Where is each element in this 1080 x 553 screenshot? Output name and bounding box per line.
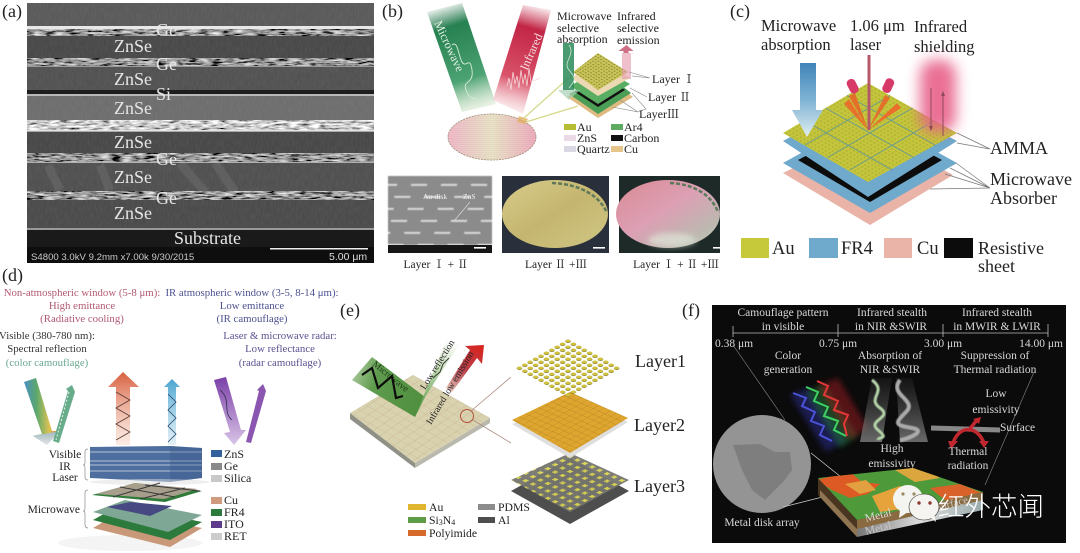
- SEM info bar: [31, 248, 368, 263]
- absorption label: NIR &SWIR: [860, 364, 921, 376]
- panel f: spectrum-segmented metasurface: [712, 305, 1066, 543]
- panel e: layered metasurface: [340, 300, 686, 540]
- base sheet: [350, 375, 490, 468]
- panel label e: (e): [340, 300, 360, 321]
- SEM image: [27, 3, 374, 263]
- callout: infrared selective emission: Infrared: [617, 9, 656, 23]
- legend b: Quartz: [577, 142, 610, 156]
- thermal radiation label: radiation: [948, 460, 989, 472]
- wavelength axis: [733, 324, 1048, 337]
- layered absorber: [783, 83, 957, 225]
- watermark text: 红外芯闻: [938, 492, 1044, 522]
- band headings: [737, 307, 1041, 333]
- heading: laser: laser: [850, 35, 882, 54]
- material labels: Ge: [156, 20, 177, 40]
- arrow: visible incident: [24, 378, 60, 445]
- multilayer film: [90, 446, 210, 485]
- laser and microwave radar text: (radar camouflage): [239, 357, 322, 369]
- legend d bottom: [211, 493, 247, 543]
- SEM info bar: S4800 3.0kV 9.2mm x7.00k 9/30/2015: [31, 252, 194, 263]
- layer labels: Layer2: [634, 415, 685, 435]
- legend d top: Silica: [224, 471, 252, 485]
- metal disk array label: Metal disk array: [724, 517, 800, 529]
- legend b: Ar4: [624, 120, 643, 134]
- material labels: Ge: [156, 188, 177, 208]
- layer labels: LayerⅢ: [639, 107, 679, 121]
- high emissivity label: High: [880, 443, 904, 455]
- panel a: SEM cross-section: [2, 1, 374, 263]
- microwave absorber stack: [58, 483, 202, 551]
- legend e: 3: [439, 518, 443, 527]
- projection lines: [733, 345, 1034, 485]
- material labels: ZnSe: [114, 203, 152, 223]
- material labels: Ge: [156, 149, 177, 169]
- band headings: in visible: [762, 321, 804, 333]
- arrow: radar incident: [214, 377, 246, 445]
- microwave absorber label: Absorber: [990, 188, 1057, 208]
- terrain slab: Metal: [864, 520, 893, 538]
- microwave incident beam: Microwave: [370, 360, 410, 395]
- arrow: infrared emission: [164, 379, 180, 445]
- callout: infrared selective emission: emission: [617, 33, 660, 47]
- terrain slab: Metal: [864, 507, 893, 525]
- legend e: Al: [498, 514, 510, 527]
- material labels: ZnSe: [114, 69, 152, 89]
- legend c: Resistive: [978, 238, 1044, 258]
- legend e: Si: [429, 514, 439, 527]
- photo captions: [404, 259, 719, 271]
- microwave beam: Microwave: [431, 18, 467, 74]
- material labels: ZnSe: [114, 167, 152, 187]
- terrain slab: [815, 465, 985, 538]
- band headings: Camouflage pattern: [737, 307, 829, 319]
- thermal radiation arcs: [948, 417, 989, 449]
- visible text: (color camouflage): [6, 357, 89, 369]
- photo: layer II + III wafer: [502, 176, 609, 253]
- callout: infrared selective emission: selective: [617, 21, 659, 35]
- legend b: Au: [577, 120, 592, 134]
- heading: infrared shielding: Infrared: [914, 17, 968, 36]
- callout: microwave selective absorption: selective: [557, 21, 599, 35]
- bracket labels: Microwave: [28, 504, 80, 516]
- panel d: multilayer multi-band camouflage: [0, 265, 339, 551]
- legend e: PDMS: [498, 501, 530, 514]
- photo captions: Layer Ⅰ + Ⅱ +Ⅲ: [633, 259, 719, 271]
- panel c: AMMA absorber: [730, 1, 1072, 276]
- layer 3: [511, 453, 629, 524]
- bracket labels: [28, 449, 88, 528]
- legend c: sheet: [978, 256, 1015, 276]
- surface label: Surface: [1000, 422, 1035, 434]
- legend e: Polyimide: [429, 527, 477, 540]
- visible text: Spectral reflection: [7, 343, 87, 355]
- color generation label: generation: [764, 364, 813, 376]
- IR atmospheric window text: (IR camouflage): [216, 313, 288, 325]
- layer stack: [558, 43, 650, 118]
- low reflection beam: [415, 336, 462, 417]
- band headings: in MWIR & LWIR: [953, 321, 1041, 333]
- wavelength ticks: 0.75 μm: [819, 338, 857, 350]
- callout: microwave selective absorption: Microwave: [557, 9, 612, 23]
- legend b: Carbon: [624, 131, 659, 145]
- panel label d: (d): [2, 265, 23, 286]
- laser rays: [844, 55, 901, 130]
- visible text: Visible (380-780 nm):: [0, 330, 95, 342]
- magnifier callout: [460, 377, 511, 443]
- legend e: 4: [451, 518, 455, 527]
- arrow: thermal emission: [108, 372, 139, 445]
- suppression label: Suppression of: [961, 350, 1029, 362]
- material labels: [114, 20, 241, 248]
- high emissivity label: emissivity: [868, 458, 916, 470]
- microwave beam: [427, 3, 496, 112]
- callout: microwave selective absorption: absorption: [557, 32, 608, 46]
- thermal radiation label: Thermal: [949, 446, 987, 458]
- NIR SWIR absorption beams: [860, 378, 928, 442]
- blue microwave arrow: [792, 63, 823, 137]
- legend e: Au: [429, 501, 443, 514]
- microwave absorber label: Microwave: [990, 169, 1072, 189]
- band headings: in NIR &SWIR: [855, 321, 927, 333]
- legend b: [564, 120, 659, 156]
- material labels: Ge: [156, 54, 177, 74]
- infrared emission arrow: Infrared low emission: [424, 349, 477, 427]
- legend d top: [211, 447, 252, 485]
- infrared arrows: [929, 88, 945, 136]
- bracket labels: Laser: [52, 472, 78, 484]
- photo: layer I + II + III wafer: [616, 176, 720, 253]
- legend c: FR4: [841, 239, 873, 259]
- legend d bottom: FR4: [224, 505, 245, 519]
- infrared glow: [920, 60, 956, 132]
- panel label f: (f): [682, 300, 700, 321]
- layer 1: [515, 338, 622, 397]
- wavelength ticks: [715, 338, 1063, 350]
- IR atmospheric window text: Low emittance: [220, 300, 284, 312]
- heading: laser: 1.06 μm: [850, 16, 905, 35]
- laser and microwave radar text: Laser & microwave radar:: [223, 330, 337, 342]
- material labels: Si: [156, 84, 171, 104]
- photo: SEM of layer I + II: [388, 176, 492, 253]
- legend c: [741, 238, 1044, 276]
- surface bar: [931, 428, 1000, 430]
- infrared beam: Infrared: [517, 31, 545, 72]
- low reflection beam: Low reflection: [418, 338, 457, 392]
- legend b: ZnS: [577, 131, 597, 145]
- color generation label: Color: [775, 350, 801, 362]
- arrow: radar reflected: [246, 384, 266, 443]
- band headings: Infrared stealth: [962, 307, 1032, 319]
- microwave incident beam: [352, 357, 425, 417]
- non-atmospheric window text: Non-atmospheric window (5-8 μm):: [4, 287, 160, 299]
- material labels: ZnSe: [114, 98, 152, 118]
- legend d bottom: Cu: [224, 493, 238, 507]
- legend d bottom: RET: [224, 529, 247, 543]
- visible text: [0, 330, 95, 369]
- photo captions: Layer Ⅰ + Ⅱ: [404, 259, 468, 271]
- material labels: Substrate: [174, 228, 241, 248]
- heading: microwave absorption: absorption: [761, 35, 831, 54]
- legend d bottom: ITO: [224, 517, 244, 531]
- layer labels: Layer1: [635, 351, 686, 371]
- metal disk magnified circle: [713, 415, 857, 513]
- arrow: visible reflected: [53, 385, 75, 443]
- photo captions: Layer Ⅱ +Ⅲ: [525, 259, 587, 271]
- suppression label: Thermal radiation: [954, 364, 1037, 376]
- legend c: Au: [772, 239, 795, 259]
- legend e: [408, 501, 530, 540]
- IR atmospheric window text: IR atmospheric window (3-5, 8-14 μm):: [165, 287, 339, 299]
- terrain slab: Surface: [934, 494, 969, 514]
- panel b: selective absorption and emission: [382, 1, 720, 271]
- bracket labels: IR: [59, 461, 71, 473]
- material labels: ZnSe: [114, 36, 152, 56]
- panel label a: (a): [2, 1, 22, 22]
- legend c: Cu: [917, 239, 939, 259]
- low emissivity label: emissivity: [972, 404, 1020, 416]
- photo: SEM of layer I + II: ZnS: [463, 192, 476, 201]
- laser and microwave radar text: Low reflectance: [245, 343, 315, 355]
- watermark: wechat icon: [893, 485, 939, 522]
- panel label b: (b): [382, 1, 403, 22]
- leader lines: [930, 133, 990, 189]
- legend b: Cu: [624, 142, 638, 156]
- low emissivity label: Low: [985, 388, 1007, 400]
- infrared beam: [493, 5, 551, 114]
- layer labels: Layer Ⅰ: [652, 72, 695, 86]
- band headings: Infrared stealth: [857, 307, 927, 319]
- color generation waves: [790, 378, 868, 452]
- wavelength ticks: 14.00 μm: [1019, 338, 1063, 350]
- wavelength ticks: 0.38 μm: [715, 338, 753, 350]
- layer 2: [512, 392, 628, 458]
- absorption label: Absorption of: [858, 350, 922, 362]
- layer labels: Layer Ⅱ: [648, 90, 691, 104]
- heading: microwave absorption: Microwave: [761, 16, 836, 35]
- material labels: ZnSe: [114, 132, 152, 152]
- layer labels: Layer3: [634, 476, 685, 496]
- wafer disk: [448, 75, 578, 160]
- bracket labels: Visible: [49, 449, 81, 461]
- legend d top: ZnS: [224, 447, 244, 461]
- SEM info bar: 5.00 μm: [329, 251, 367, 263]
- non-atmospheric window text: High emittance: [49, 300, 115, 312]
- legend d top: Ge: [224, 459, 238, 473]
- wavelength ticks: 3.00 μm: [924, 338, 962, 350]
- panel label c: (c): [730, 1, 750, 22]
- photo: SEM of layer I + II: Au-disk: [423, 192, 447, 201]
- AMMA label: AMMA: [990, 138, 1048, 158]
- legend e: N: [443, 514, 452, 527]
- non-atmospheric window text: (Radiative cooling): [40, 313, 124, 325]
- heading: infrared shielding: shielding: [914, 37, 974, 56]
- black panel: [712, 305, 1066, 543]
